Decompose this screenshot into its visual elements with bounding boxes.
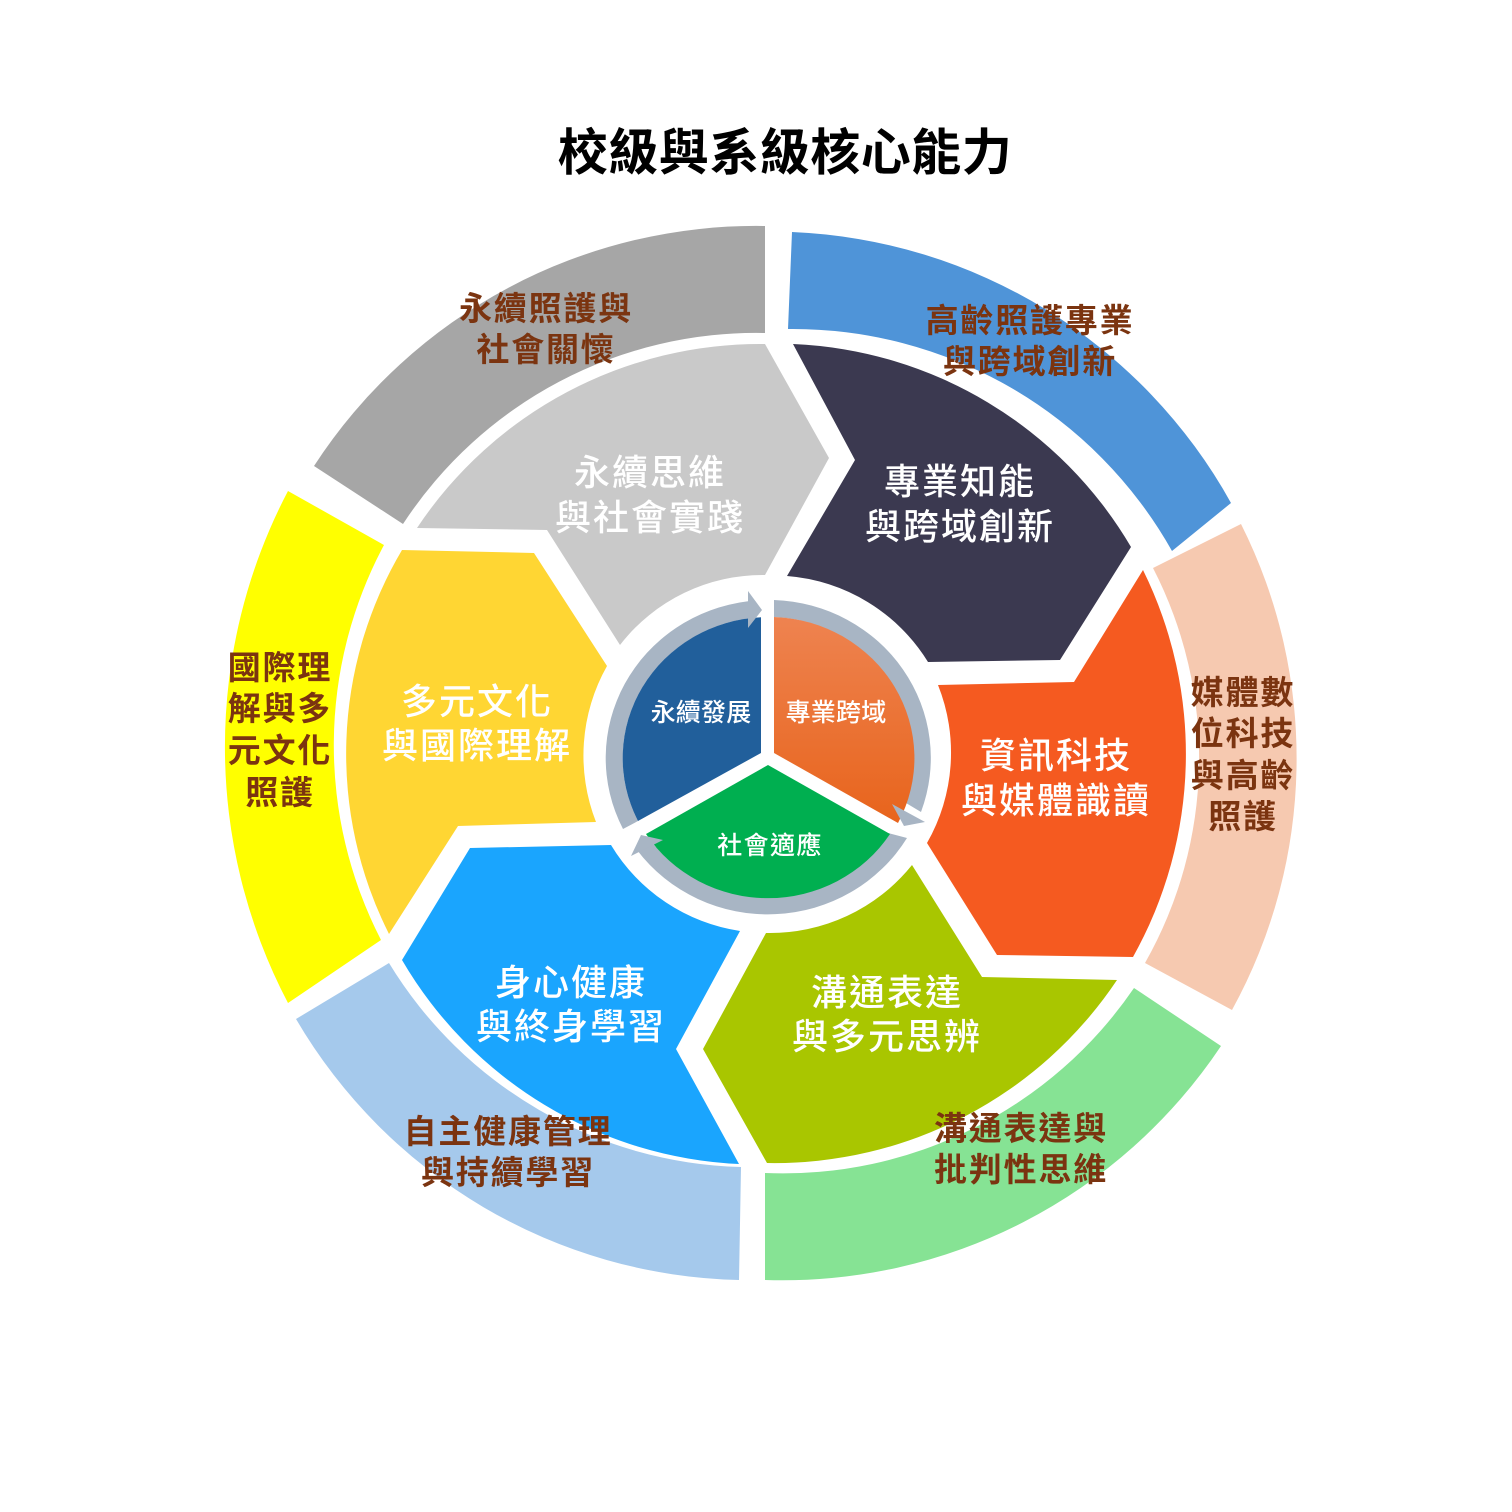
segment: 溝通表達與多元思辨: 與多元思辨 <box>792 1016 982 1057</box>
segment: 國際理解與多元文化照護: 照護 <box>245 774 315 811</box>
segment: 資訊科技與媒體識讀: 資訊科技 <box>980 735 1132 776</box>
segment: 身心健康與終身學習: 與終身學習 <box>476 1006 666 1047</box>
sector: 永續發展: 永續發展 <box>651 699 751 727</box>
segment: 專業知能與跨域創新: 與跨域創新 <box>865 506 1055 547</box>
sector: 專業跨域: 專業跨域 <box>786 699 886 727</box>
segment: 高齡照護專業與跨域創新 <box>788 232 1231 551</box>
segment: 永續思維與社會實踐 <box>417 344 829 645</box>
segment: 溝通表達與批判性思維: 批判性思維 <box>934 1151 1108 1188</box>
segment: 多元文化與國際理解 <box>346 550 607 934</box>
segment: 媒體數位科技與高齡照護: 照護 <box>1208 798 1278 835</box>
segment: 國際理解與多元文化照護: 國際理 <box>228 649 332 686</box>
segment: 永續照護與社會關懷: 社會關懷 <box>476 331 616 368</box>
sector: 永續發展 <box>606 591 762 829</box>
segment: 溝通表達與批判性思維: 溝通表達與 <box>934 1110 1108 1147</box>
segment: 溝通表達與多元思辨 <box>703 865 1117 1163</box>
segment: 身心健康與終身學習 <box>402 845 740 1164</box>
segment: 溝通表達與批判性思維 <box>765 988 1221 1280</box>
segment: 身心健康與終身學習: 身心健康 <box>495 962 647 1003</box>
segment: 媒體數位科技與高齡照護 <box>1145 524 1297 1010</box>
segment: 自主健康管理與持續學習: 自主健康管理 <box>404 1113 612 1150</box>
segment: 自主健康管理與持續學習: 與持續學習 <box>421 1154 595 1191</box>
segment: 國際理解與多元文化照護: 元文化 <box>228 732 332 769</box>
segment: 多元文化與國際理解: 與國際理解 <box>382 725 572 766</box>
segment: 資訊科技與媒體識讀 <box>927 570 1186 957</box>
segment: 自主健康管理與持續學習 <box>296 963 741 1280</box>
sector: 社會適應 <box>631 765 907 914</box>
segment: 多元文化與國際理解: 多元文化 <box>401 681 553 722</box>
segment: 高齡照護專業與跨域創新: 高齡照護專業 <box>926 302 1134 339</box>
sector: 專業跨域 <box>774 600 931 826</box>
segment: 資訊科技與媒體識讀: 與媒體識讀 <box>961 780 1151 821</box>
center circle: three core areas with cycle arrows <box>606 591 931 914</box>
middle ring: department-level competencies <box>346 344 1186 1164</box>
segment: 專業知能與跨域創新 <box>787 344 1131 662</box>
segment: 永續思維與社會實踐: 永續思維 <box>574 452 726 493</box>
outer ring: school-level competencies <box>225 226 1297 1280</box>
segment: 媒體數位科技與高齡照護: 與高齡 <box>1191 757 1295 794</box>
segment: 高齡照護專業與跨域創新: 與跨域創新 <box>943 343 1117 380</box>
segment: 溝通表達與多元思辨: 溝通表達 <box>811 972 963 1013</box>
sector: 社會適應: 社會適應 <box>717 831 823 860</box>
segment: 國際理解與多元文化照護: 解與多 <box>228 690 332 727</box>
segment: 國際理解與多元文化照護 <box>225 491 384 1003</box>
segment: 永續思維與社會實踐: 與社會實踐 <box>555 497 745 538</box>
segment: 媒體數位科技與高齡照護: 媒體數 <box>1191 674 1295 711</box>
segment: 媒體數位科技與高齡照護: 位科技 <box>1191 715 1295 752</box>
title: 校級與系級核心能力 <box>558 125 1012 181</box>
segment: 永續照護與社會關懷: 永續照護與 <box>459 290 633 327</box>
segment: 專業知能與跨域創新: 專業知能 <box>884 461 1036 502</box>
segment: 永續照護與社會關懷 <box>314 226 765 524</box>
